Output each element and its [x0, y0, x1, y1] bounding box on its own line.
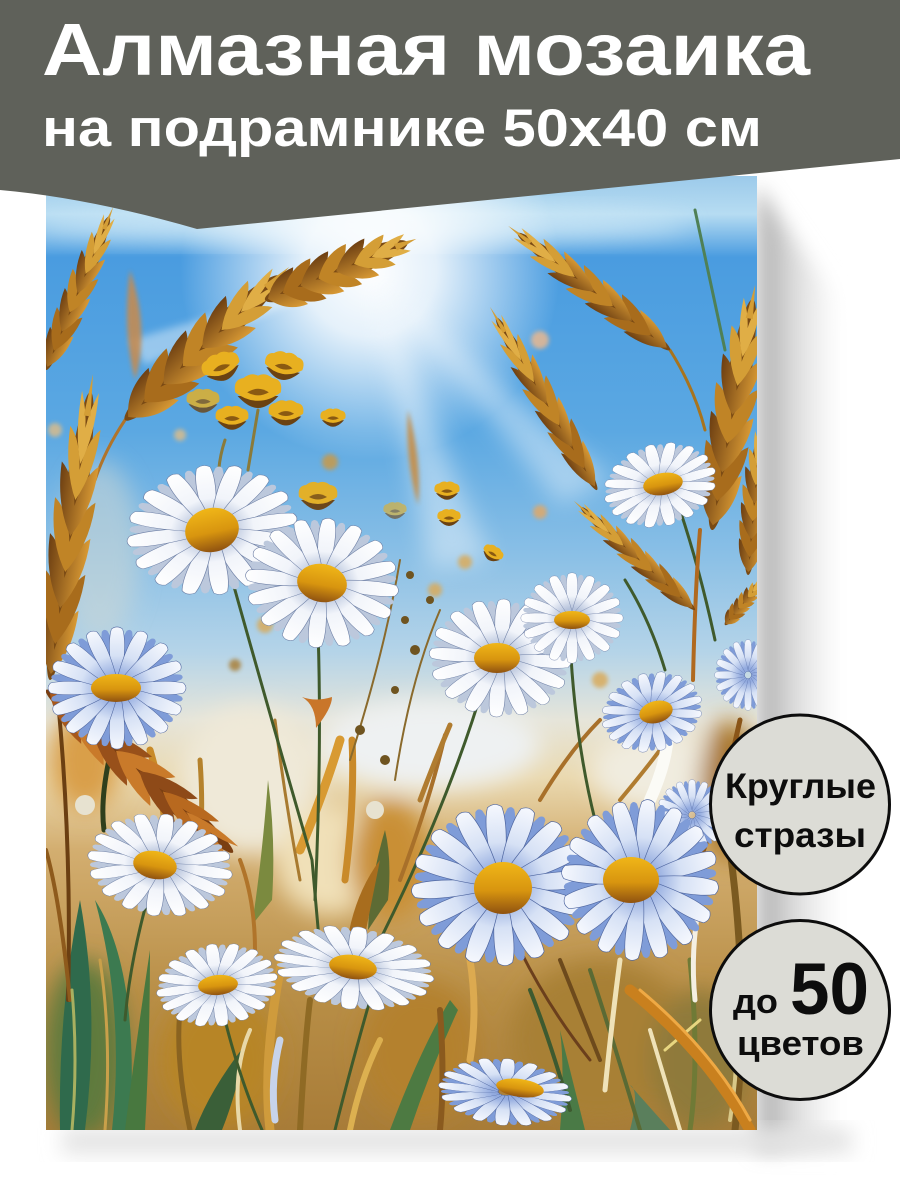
badge: up to 50 colours: 50: [790, 949, 869, 1030]
sunlight and rays: [46, 196, 686, 636]
badge: up to 50 colours: [710, 920, 890, 1100]
grass blades and stalks: [46, 700, 750, 1130]
dry seed sprigs and blurred buds: [48, 270, 608, 819]
small yellow flowers: [187, 347, 506, 565]
title: Алмазная мозаика: [42, 8, 811, 91]
badge: round rhinestones: Круглые: [725, 767, 876, 806]
painting: daisies and wheat field: [46, 176, 757, 1130]
subtitle: на подрамнике 50х40 см: [42, 99, 762, 158]
canvas drop shadow: [62, 185, 852, 1154]
sky background: [46, 176, 757, 1130]
badge: up to 50 colours: до: [733, 983, 778, 1021]
top banner: [0, 0, 900, 229]
wheat ears: [30, 202, 776, 867]
flower stems: [95, 210, 725, 1130]
daisies: [48, 430, 781, 1132]
badge: round rhinestones: стразы: [734, 816, 866, 855]
field light and colour patches: [45, 700, 760, 1140]
badge: round rhinestones: [710, 715, 890, 894]
badge: up to 50 colours: цветов: [737, 1025, 864, 1063]
